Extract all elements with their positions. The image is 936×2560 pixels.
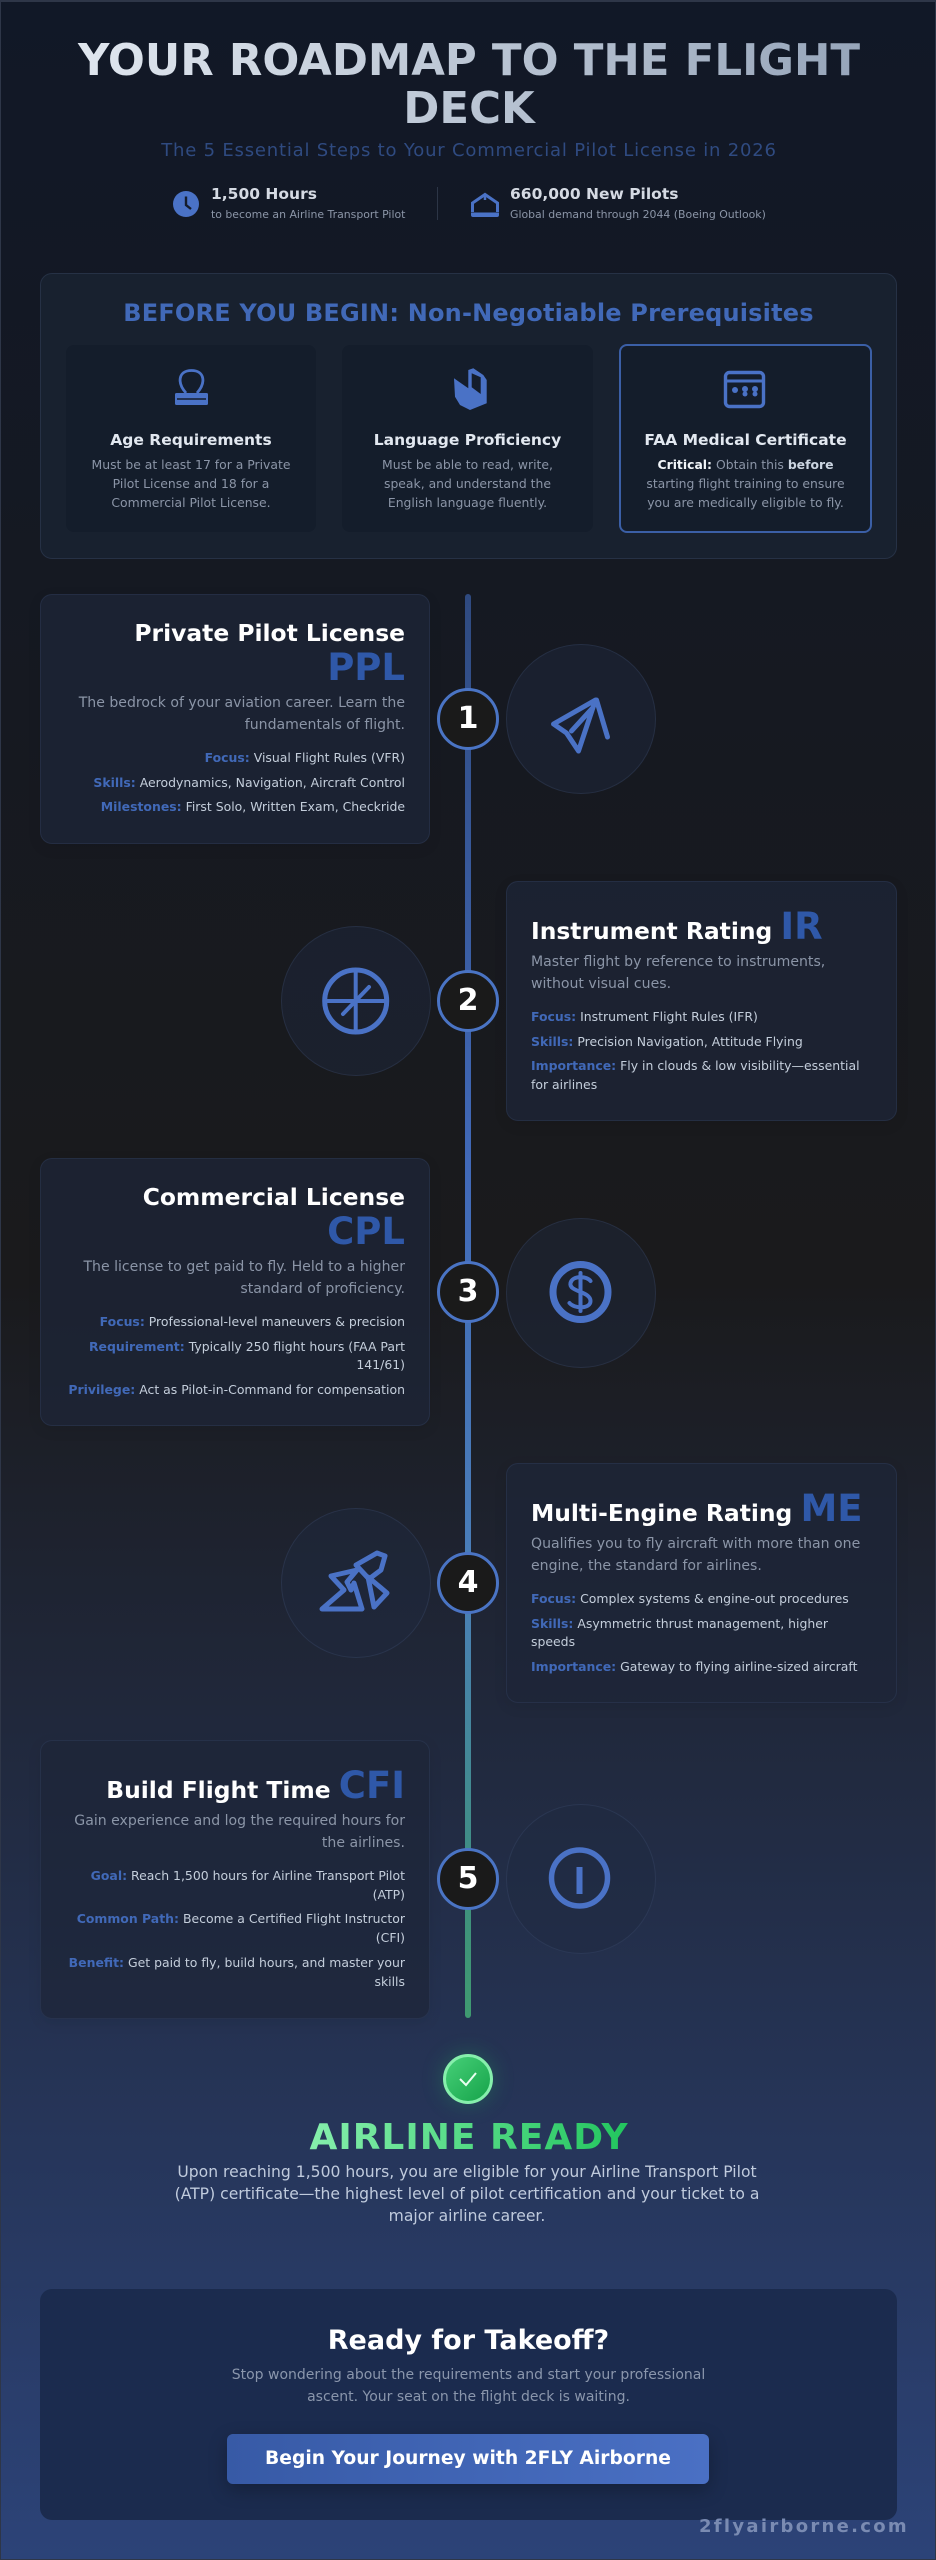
step detail: Focus: Instrument Flight Rules (IFR) <box>531 1009 758 1024</box>
panel: call to action <box>40 2289 897 2520</box>
stat caption: to become an Airline Transport Pilot <box>211 208 405 221</box>
step 4 number: 4 <box>458 1565 478 1600</box>
airline ready text: Upon reaching 1,500 hours, you are eligible for your Airline Transport Pilot (ATP) certificate—the highest level of pilot certification and your ticket to a major airline career. <box>175 2163 759 2225</box>
card: faa medical certificate: FAA Medical Certificate <box>644 431 847 449</box>
step 2 number <box>437 970 499 1032</box>
card: language proficiency: Language Proficiency <box>374 431 561 449</box>
step detail: Goal: Reach 1,500 hours for Airline Transport Pilot (ATP) <box>91 1868 405 1902</box>
stat caption: Global demand through 2044 (Boeing Outlook) <box>510 208 766 221</box>
icon: age badge <box>175 369 208 405</box>
card: language proficiency: Must be able to read, write, speak, and understand the English language fluently. <box>382 457 553 510</box>
step detail: Requirement: Typically 250 flight hours (FAA Part 141/61) <box>89 1339 405 1372</box>
step detail: Skills: Precision Navigation, Attitude Flying <box>531 1034 803 1049</box>
step title: Build Flight Time CFI <box>106 1764 405 1807</box>
step description: Master flight by reference to instruments, without visual cues. <box>531 954 825 992</box>
step 1 number <box>437 688 499 750</box>
stat: 1,500 hours <box>173 185 406 221</box>
card: language proficiency <box>342 345 593 532</box>
step title: Commercial License CPL <box>143 1183 405 1253</box>
step 3 card: CPL <box>40 1158 430 1426</box>
step 3 number: 3 <box>458 1274 478 1309</box>
step detail: Milestones: First Solo, Written Exam, Checkride <box>101 799 405 814</box>
card: age requirements: Age Requirements <box>110 431 272 449</box>
step 2 card: IR <box>506 881 897 1121</box>
step 5 number: 5 <box>458 1861 478 1896</box>
step 1 card: PPL <box>40 594 430 844</box>
stat headline: 660,000 New Pilots <box>510 185 678 203</box>
step 5 number <box>437 1848 499 1910</box>
step 1 icon: paper plane <box>506 644 656 794</box>
step description: The license to get paid to fly. Held to a higher standard of proficiency. <box>83 1259 405 1297</box>
heading: prerequisites: BEFORE YOU BEGIN: Non-Negotiable Prerequisites <box>123 299 814 327</box>
icon: clock <box>173 191 199 217</box>
title: YOUR ROADMAP TO THE FLIGHT DECK <box>78 36 860 134</box>
card: age requirements <box>66 345 316 532</box>
step 5 icon: power dial <box>506 1804 656 1954</box>
step detail: Focus: Visual Flight Rules (VFR) <box>205 750 405 765</box>
step detail: Importance: Fly in clouds & low visibility—essential for airlines <box>531 1058 860 1092</box>
cta text: Stop wondering about the requirements and start your professional ascent. Your seat on the flight deck is waiting. <box>232 2367 705 2405</box>
step 2 number: 2 <box>458 983 478 1018</box>
stat: 660,000 new pilots <box>471 185 766 221</box>
step detail: Common Path: Become a Certified Flight Instructor (CFI) <box>77 1911 405 1945</box>
step 3 number <box>437 1261 499 1323</box>
step 4 icon: multi-engine plane <box>281 1508 431 1658</box>
step 4 number <box>437 1552 499 1614</box>
step detail: Focus: Professional-level maneuvers & precision <box>100 1314 405 1329</box>
step title: Private Pilot License PPL <box>134 619 405 689</box>
divider <box>437 187 438 220</box>
step description: Gain experience and log the required hours for the airlines. <box>74 1813 405 1851</box>
cta heading: Ready for Takeoff? <box>328 2325 609 2356</box>
step description: The bedrock of your aviation career. Learn the fundamentals of flight. <box>79 695 405 733</box>
airline ready check badge <box>443 2054 493 2104</box>
cta button: Begin Your Journey with 2FLY Airborne <box>265 2448 671 2469</box>
step detail: Skills: Asymmetric thrust management, higher speeds <box>531 1616 828 1649</box>
roadmap line <box>465 594 471 2018</box>
step detail: Privilege: Act as Pilot-in-Command for compensation <box>68 1382 405 1397</box>
cta button <box>227 2434 709 2484</box>
step title: Instrument Rating IR <box>531 905 823 948</box>
step 2 icon: instrument dial <box>281 926 431 1076</box>
panel: prerequisites <box>40 273 897 559</box>
step description: Qualifies you to fly aircraft with more than one engine, the standard for airlines. <box>531 1536 860 1574</box>
airline ready heading: AIRLINE READY <box>309 2117 629 2158</box>
card: faa medical certificate <box>619 344 872 533</box>
step detail: Focus: Complex systems & engine-out procedures <box>531 1591 849 1606</box>
icon: medical certificate <box>724 370 766 408</box>
step detail: Importance: Gateway to flying airline-sized aircraft <box>531 1659 857 1674</box>
step detail: Skills: Aerodynamics, Navigation, Aircraft Control <box>93 775 405 790</box>
stat headline: 1,500 Hours <box>211 185 317 203</box>
step 4 card: ME <box>506 1463 897 1703</box>
card: faa medical certificate: Critical: Obtain this before starting flight training to ensure you are medically eligible to fly. <box>646 457 845 510</box>
step 1 number: 1 <box>458 701 478 736</box>
icon: upload box <box>471 192 499 217</box>
step 5 card: CFI <box>40 1740 430 2019</box>
card: age requirements: Must be at least 17 for a Private Pilot License and 18 for a Commercial Pilot License. <box>92 457 290 510</box>
step title: Multi-Engine Rating ME <box>531 1487 863 1530</box>
step detail: Benefit: Get paid to fly, build hours, and master your skills <box>69 1955 405 1989</box>
subtitle: The 5 Essential Steps to Your Commercial Pilot License in 2026 <box>161 140 777 161</box>
icon: open book <box>454 368 487 410</box>
watermark: 2flyairborne.com <box>699 2516 909 2537</box>
step 3 icon: dollar coin <box>506 1218 656 1368</box>
